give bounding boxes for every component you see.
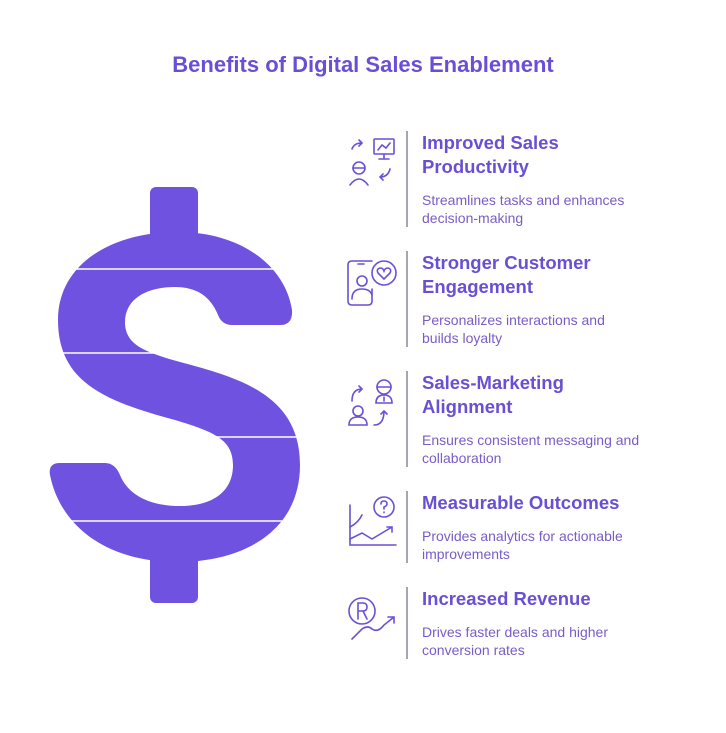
dollar sign bbox=[50, 187, 300, 603]
title: Sales-Marketing bbox=[422, 372, 564, 393]
desc: Drives faster deals and higher bbox=[422, 624, 608, 640]
desc bbox=[422, 528, 623, 562]
title: Improved Sales bbox=[422, 132, 559, 153]
desc bbox=[422, 192, 624, 226]
title bbox=[422, 252, 591, 297]
title: Increased Revenue bbox=[422, 588, 591, 609]
title: Alignment bbox=[422, 396, 512, 417]
item: revenue bbox=[348, 587, 608, 659]
desc: Streamlines tasks and enhances bbox=[422, 192, 624, 208]
desc: Personalizes interactions and bbox=[422, 312, 605, 328]
item: engagement bbox=[347, 251, 605, 347]
desc: conversion rates bbox=[422, 642, 525, 658]
title: Productivity bbox=[422, 156, 529, 177]
desc: Ensures consistent messaging and bbox=[422, 432, 639, 448]
item: productivity bbox=[349, 131, 624, 227]
desc bbox=[422, 312, 605, 346]
desc: improvements bbox=[422, 546, 510, 562]
title bbox=[422, 132, 559, 177]
item: outcomes bbox=[349, 491, 623, 563]
desc bbox=[422, 432, 639, 466]
icon: productivity bbox=[349, 138, 395, 186]
icon: phone heart bbox=[347, 260, 397, 306]
desc: builds loyalty bbox=[422, 330, 502, 346]
desc: decision-making bbox=[422, 210, 523, 226]
icon: chart question bbox=[349, 496, 397, 546]
icon: revenue bbox=[348, 597, 395, 640]
icon: alignment bbox=[348, 379, 393, 426]
title: Engagement bbox=[422, 276, 533, 297]
title: Benefits of Digital Sales Enablement bbox=[172, 52, 554, 77]
desc: Provides analytics for actionable bbox=[422, 528, 623, 544]
desc bbox=[422, 624, 608, 658]
desc: collaboration bbox=[422, 450, 501, 466]
title bbox=[422, 372, 564, 417]
item: alignment bbox=[348, 371, 639, 467]
title: Measurable Outcomes bbox=[422, 492, 619, 513]
title: Stronger Customer bbox=[422, 252, 591, 273]
